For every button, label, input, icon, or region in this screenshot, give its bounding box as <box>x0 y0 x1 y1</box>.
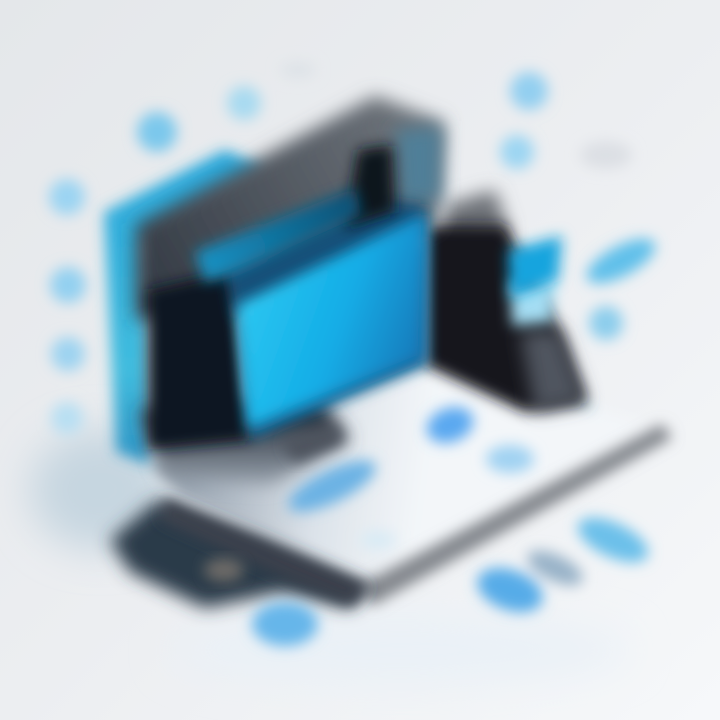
right blue rim <box>395 126 442 205</box>
monitor foot fade <box>140 395 350 485</box>
floor shadow <box>30 430 630 685</box>
device lower panel <box>520 330 586 412</box>
upper blue strip <box>195 188 362 282</box>
laptop base <box>110 355 672 608</box>
dark base strip <box>160 498 370 606</box>
dark blue band above screen <box>225 200 425 320</box>
monitor stand <box>282 426 345 462</box>
floating icons: right <box>500 72 662 432</box>
grey edge of sheet <box>360 424 672 606</box>
base highlight <box>204 558 244 582</box>
dark keyboard base <box>110 500 368 608</box>
device top <box>445 190 510 245</box>
main screen <box>237 213 426 428</box>
dark left frame <box>148 270 250 450</box>
device blue panel <box>508 236 562 298</box>
monitor back top <box>136 96 444 320</box>
floating icons: left and top <box>49 62 316 434</box>
blue marks on sheet <box>282 401 534 549</box>
side device <box>425 190 586 412</box>
black corner <box>345 145 395 228</box>
monitor <box>104 96 444 485</box>
blue outer edge <box>104 150 270 465</box>
device pale panel <box>510 280 556 326</box>
screen surround <box>240 235 428 440</box>
device silhouette <box>425 225 586 412</box>
floating icons: bottom <box>252 509 655 646</box>
white sheet <box>150 355 645 585</box>
